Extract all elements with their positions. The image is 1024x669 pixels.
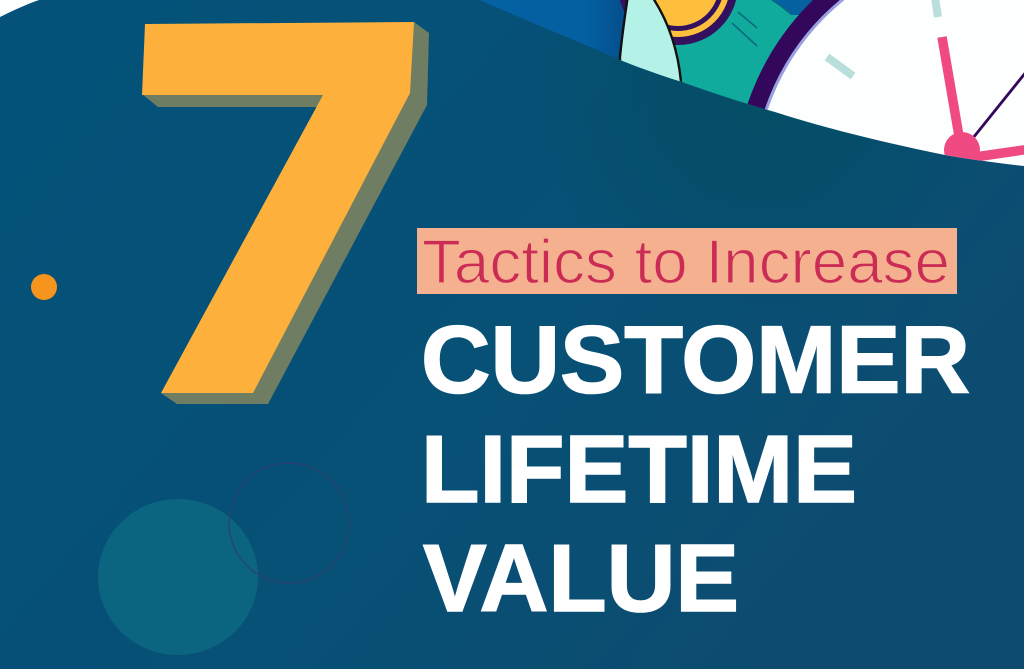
- illustration: clock and coin behind curved edge: [480, 0, 1024, 166]
- number 7: [142, 22, 429, 404]
- decoration: white corner shape: [0, 0, 39, 17]
- title: CUSTOMER: [421, 306, 970, 414]
- 7 front face: [142, 22, 414, 393]
- 7 extruded side: [142, 22, 429, 404]
- icon: clock face: [748, 0, 1024, 166]
- title: LIFETIME: [421, 416, 857, 523]
- icon: mint leaf: [618, 0, 682, 82]
- orange dot: [31, 274, 57, 300]
- outlined circle: [229, 463, 349, 583]
- subtitle banner: Tactics to Increase: [422, 228, 950, 297]
- teal circle: [98, 499, 258, 655]
- teal panel: [630, 0, 830, 130]
- icon: coin: [618, 0, 790, 46]
- title: [421, 306, 970, 632]
- title: VALUE: [423, 525, 739, 632]
